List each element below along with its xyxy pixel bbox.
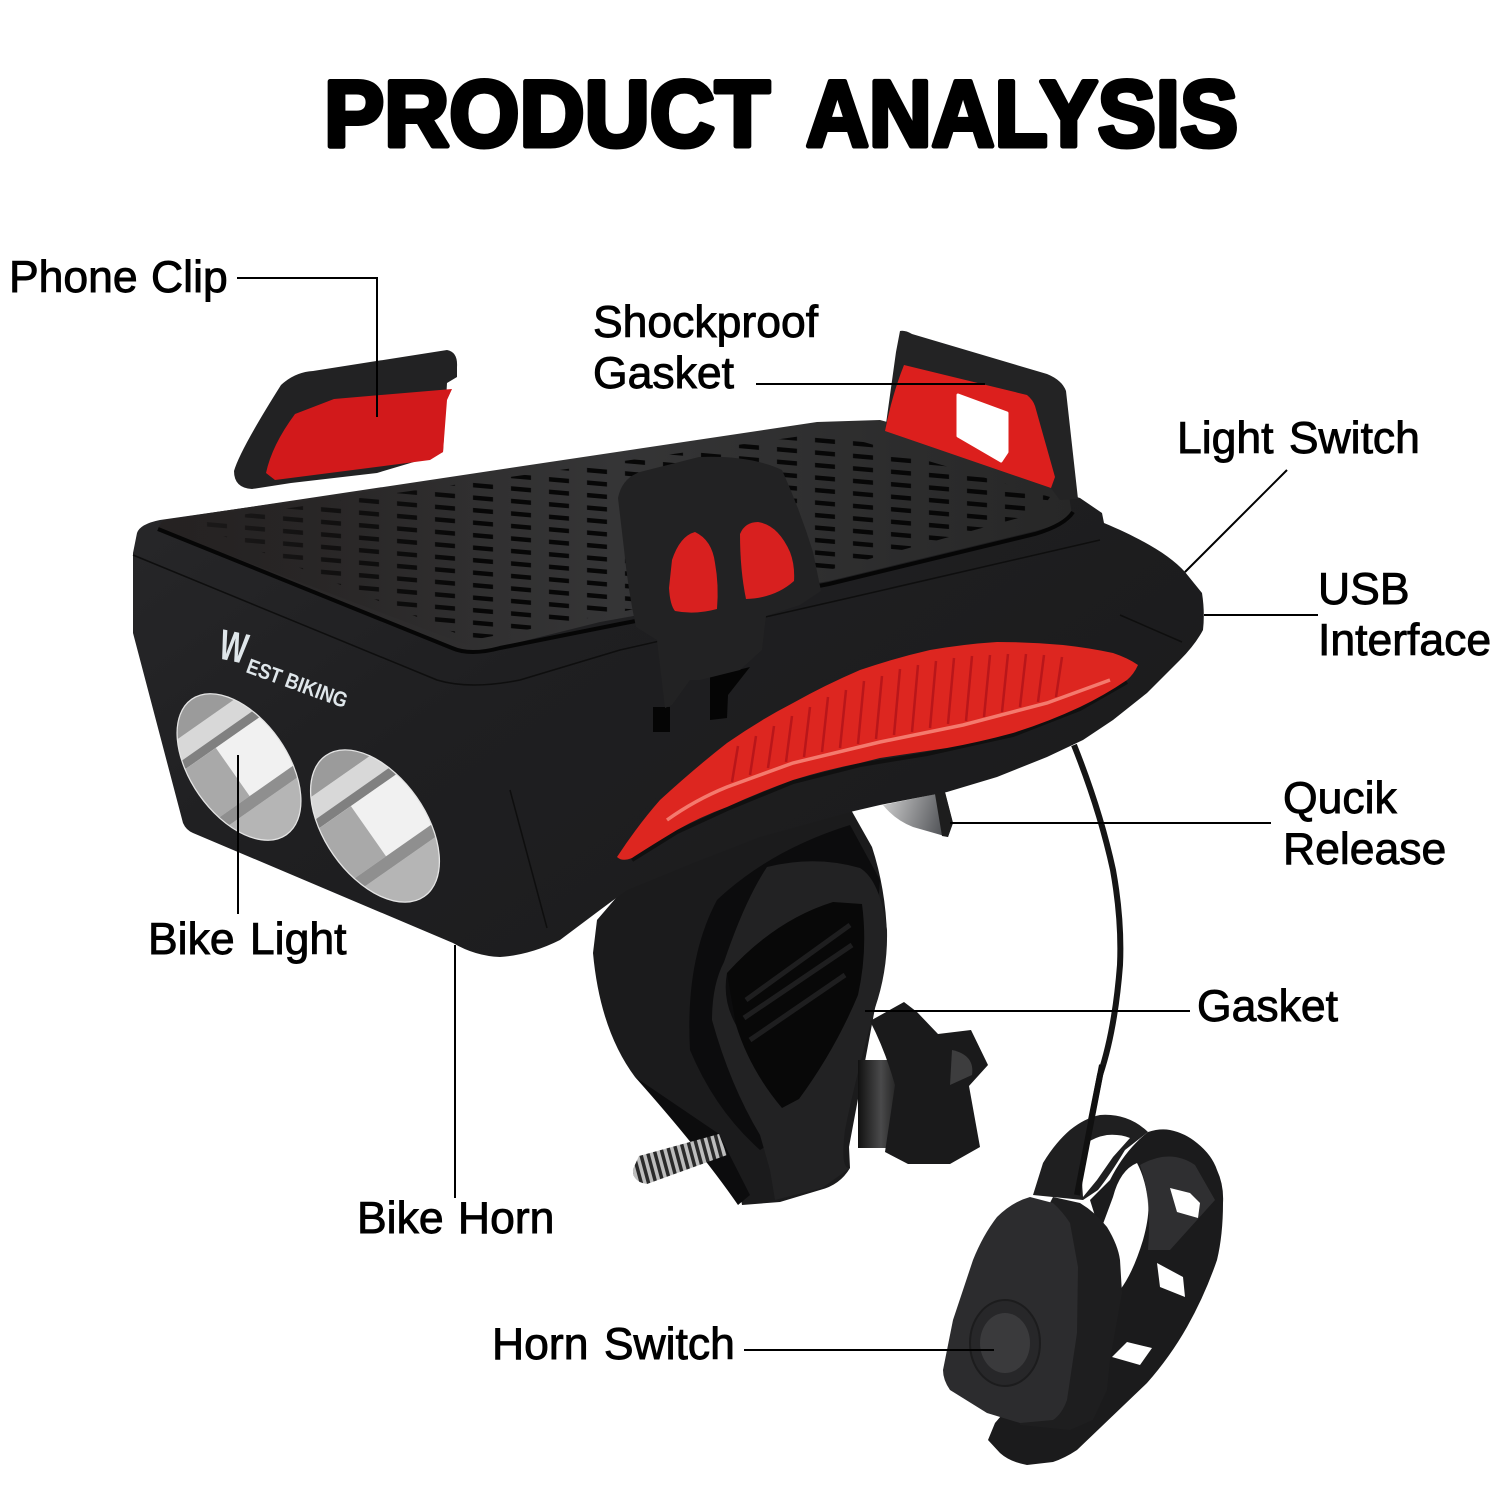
- leader lines: [237, 278, 1318, 1350]
- label: quick release: Release: [1283, 825, 1446, 874]
- right phone clip: [885, 331, 1078, 500]
- label: bike horn: Bike Horn: [357, 1194, 554, 1243]
- label: bike light: Bike Light: [148, 915, 347, 964]
- top phone rest plate: [158, 420, 1072, 652]
- plate front edge and body ridge: [133, 512, 1182, 928]
- product: bike light phone holder: [133, 331, 1223, 1465]
- label: phone clip: Phone Clip: [9, 253, 228, 302]
- center top clamp: [618, 457, 821, 732]
- label: quick release: Qucik: [1283, 774, 1397, 823]
- title: ANALYSIS: [806, 61, 1238, 166]
- screw: [633, 1134, 727, 1184]
- brand logo: [215, 621, 351, 713]
- label: shockproof gasket: Gasket: [593, 349, 735, 398]
- horn switch body: [943, 1197, 1122, 1430]
- label: light switch: Light Switch: [1177, 414, 1420, 463]
- left phone clip: [234, 350, 457, 489]
- label: horn switch: Horn Switch: [492, 1320, 735, 1369]
- brand logo: EST BIKING: [243, 655, 351, 713]
- red side stripe: [617, 642, 1138, 860]
- bike light lens right: [310, 749, 440, 903]
- label: gasket: Gasket: [1197, 982, 1339, 1031]
- label: usb interface: Interface: [1318, 616, 1491, 665]
- label: shockproof gasket: Shockproof: [593, 298, 818, 347]
- bike light lens left: [176, 693, 302, 841]
- handlebar clamp: [593, 808, 887, 1205]
- brand logo: W: [215, 621, 253, 673]
- horn switch cable front: [1077, 1065, 1102, 1195]
- main housing: [133, 424, 1204, 957]
- horn switch strap: [988, 1129, 1223, 1465]
- horn switch cable: [1074, 745, 1120, 1190]
- tightening knob: [858, 1002, 988, 1164]
- quick release lever: [883, 792, 953, 837]
- horn switch strap loop: [1033, 1115, 1148, 1200]
- title: PRODUCT: [324, 61, 770, 166]
- label: usb interface: USB: [1318, 565, 1410, 614]
